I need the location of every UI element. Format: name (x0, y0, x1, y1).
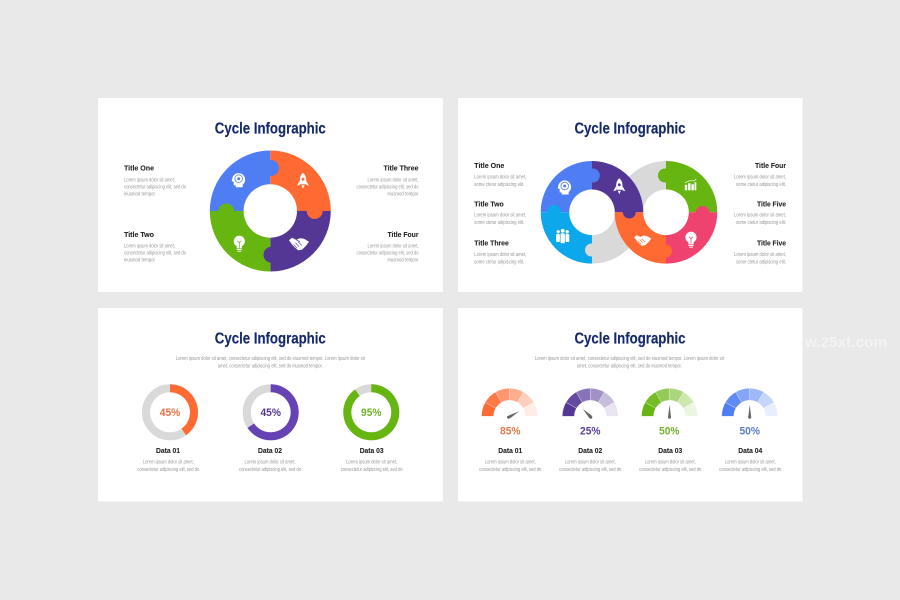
text block: title one: eiusmod tempor (124, 191, 155, 197)
text block: data 02: Lorem ipsum dolor sit amet, (565, 460, 616, 466)
text block: title one: some ctetur adipiscing elit. (474, 182, 524, 188)
text block: data 04: Data 04 (738, 446, 763, 455)
heading: Cycle Infographic (574, 330, 686, 348)
chart: infinity loop (541, 161, 717, 264)
text block: title five (second): Title Five (757, 239, 786, 248)
icon: rocket (613, 178, 625, 194)
text block: title one: consectetur adipiscing elit, sed do (124, 184, 186, 190)
text block: title one: Lorem ipsum dolor sit amet, (474, 175, 526, 181)
text block: data 01: Lorem ipsum dolor sit amet, (143, 460, 194, 466)
text block: title two: Lorem ipsum dolor sit amet, (474, 213, 526, 219)
text block: data 03: Lorem ipsum dolor sit amet, (645, 460, 696, 466)
text block: data 03 (341, 446, 403, 473)
text block: data 01: Data 01 (498, 446, 522, 455)
text block: data 03: Data 03 (360, 446, 384, 455)
text block: title three: consectetur adipiscing elit, sed do (356, 184, 419, 190)
text block: title three: Lorem ipsum dolor sit amet, (368, 177, 418, 183)
chart: donut 45% orange (146, 388, 194, 436)
text block: title one (474, 161, 526, 188)
text block: title three: Title Three (384, 164, 418, 173)
panel: percentage donuts (98, 308, 443, 502)
chart: gauge 25% (562, 388, 618, 419)
chart: gauge 50% green (642, 388, 698, 419)
text block: title four (356, 230, 419, 264)
text block: data 02: Data 02 (258, 446, 282, 455)
text block: title five (second): Lorem ipsum dolor sit amet, (734, 252, 786, 258)
text block: title five (734, 199, 786, 226)
text block: intro: amet, consectetur adipiscing elit, sed do eiusmod tempor. (218, 363, 323, 369)
text block: title four: Lorem ipsum dolor sit amet, (734, 175, 786, 181)
text block: data 02 (239, 446, 301, 473)
text block: data 03: Data 03 (658, 446, 682, 455)
value: 50% blue: 50% (739, 426, 760, 438)
text block: title two: consectetur adipiscing elit, sed do (124, 251, 186, 257)
text block: title three: some ctetur adipiscing elit. (474, 259, 524, 265)
chart: donut 45% orange: 45% (160, 407, 180, 419)
icon: head with target (232, 173, 245, 187)
icon: rocket (297, 173, 309, 189)
text block: title five (second): some ctetur adipiscing elit. (736, 259, 786, 265)
value: 85%: 85% (500, 426, 521, 438)
text block: data 04 (719, 446, 781, 473)
text block: intro (535, 356, 724, 369)
text block: title two: Title Two (474, 199, 504, 208)
text block: title two: Lorem ipsum dolor sit amet, (124, 244, 175, 250)
text block: intro (176, 356, 365, 369)
panel: gauges (458, 308, 802, 502)
text block: title four: some ctetur adipiscing elit. (736, 182, 786, 188)
value: 25%: 25% (580, 426, 601, 438)
value: 50% green: 50% (659, 426, 680, 438)
icon: handshake (289, 238, 309, 250)
text block: data 03: Lorem ipsum dolor sit amet, (346, 460, 397, 466)
chart: donut 95% green (347, 388, 395, 436)
icon: light bulb (685, 232, 697, 248)
text block: data 02: consectetur adipiscing elit, sed do (239, 467, 301, 473)
text block: title two (124, 230, 186, 264)
text block: data 03: consectetur adipiscing elit, sed do (341, 467, 403, 473)
icon: head with target (558, 180, 571, 194)
text block: title five: Title Five (757, 199, 786, 208)
text block: title three: Lorem ipsum dolor sit amet, (474, 252, 526, 258)
text block: data 03 (639, 446, 701, 473)
icon: handshake (634, 235, 651, 246)
panel: infinity puzzle loop (458, 98, 802, 292)
heading: Cycle Infographic (215, 120, 326, 138)
text block: title one: Title One (474, 161, 504, 170)
text block: title five (second) (734, 239, 786, 265)
text block: intro: Lorem ipsum dolor sit amet, consectetur adipiscing elit, sed do eiusmod tempor. Lorem ipsum dolor sit (176, 356, 365, 362)
text block: intro: Lorem ipsum dolor sit amet, consectetur adipiscing elit, sed do eiusmod tempor. Lorem ipsum dolor sit (535, 356, 724, 362)
chart: donut 95% green: 95% (361, 407, 382, 419)
text block: title one: Lorem ipsum dolor sit amet, (124, 177, 175, 183)
text block: title four: Lorem ipsum dolor sit amet, (368, 244, 418, 250)
text block: title five: some ctetur adipiscing elit. (736, 220, 786, 226)
text block: title two: eiusmod tempor (124, 258, 155, 264)
text block: title two: Title Two (124, 230, 154, 239)
text block: title four: consectetur adipiscing elit, sed do (356, 251, 419, 257)
text block: intro: amet, consectetur adipiscing elit, sed do eiusmod tempor. (577, 363, 682, 369)
text block: data 02: Data 02 (578, 446, 602, 455)
text block: data 04: consectetur adipiscing elit, sed do (719, 467, 781, 473)
text block: title three (356, 164, 419, 197)
text block: title one (124, 164, 186, 197)
text block: data 03: consectetur adipiscing elit, sed do (639, 467, 701, 473)
text block: title five: Lorem ipsum dolor sit amet, (734, 213, 786, 219)
text block: title one: Title One (124, 164, 154, 173)
text block: data 01: consectetur adipiscing elit, sed do (137, 467, 199, 473)
text block: title two (474, 199, 526, 226)
chart: puzzle ring (210, 150, 331, 272)
text block: data 01: Data 01 (156, 446, 180, 455)
text block: data 01: Lorem ipsum dolor sit amet, (485, 460, 536, 466)
text block: title two: some ctetur adipiscing elit. (474, 220, 524, 226)
panel: four-part puzzle ring (98, 98, 443, 292)
text block: title three (474, 239, 526, 265)
icon: light bulb (234, 236, 245, 252)
text block: title four: eiusmod tempor (388, 258, 419, 264)
text block: data 02 (559, 446, 621, 473)
text block: data 01: consectetur adipiscing elit, sed do (479, 467, 541, 473)
icon: people (556, 229, 569, 243)
chart: gauge 85% (482, 388, 538, 419)
heading: Cycle Infographic (574, 120, 686, 138)
text block: title four: Title Four (388, 230, 419, 239)
text block: data 01 (137, 446, 199, 473)
watermark: w.25xt.com (804, 334, 887, 351)
text block: data 01 (479, 446, 541, 473)
text block: title four: Title Four (755, 161, 786, 170)
chart: donut 45% purple (247, 388, 295, 436)
text block: title four (734, 161, 786, 188)
chart: donut 45% purple: 45% (260, 407, 281, 419)
heading: Cycle Infographic (215, 330, 326, 348)
text block: title three: Title Three (474, 239, 509, 248)
chart: gauge 50% blue (722, 388, 778, 419)
text block: data 02: consectetur adipiscing elit, sed do (559, 467, 621, 473)
text block: data 02: Lorem ipsum dolor sit amet, (244, 460, 296, 466)
text block: data 04: Lorem ipsum dolor sit amet, (725, 460, 776, 466)
text block: title three: eiusmod tempor (388, 191, 419, 197)
icon: bar chart (685, 179, 696, 190)
